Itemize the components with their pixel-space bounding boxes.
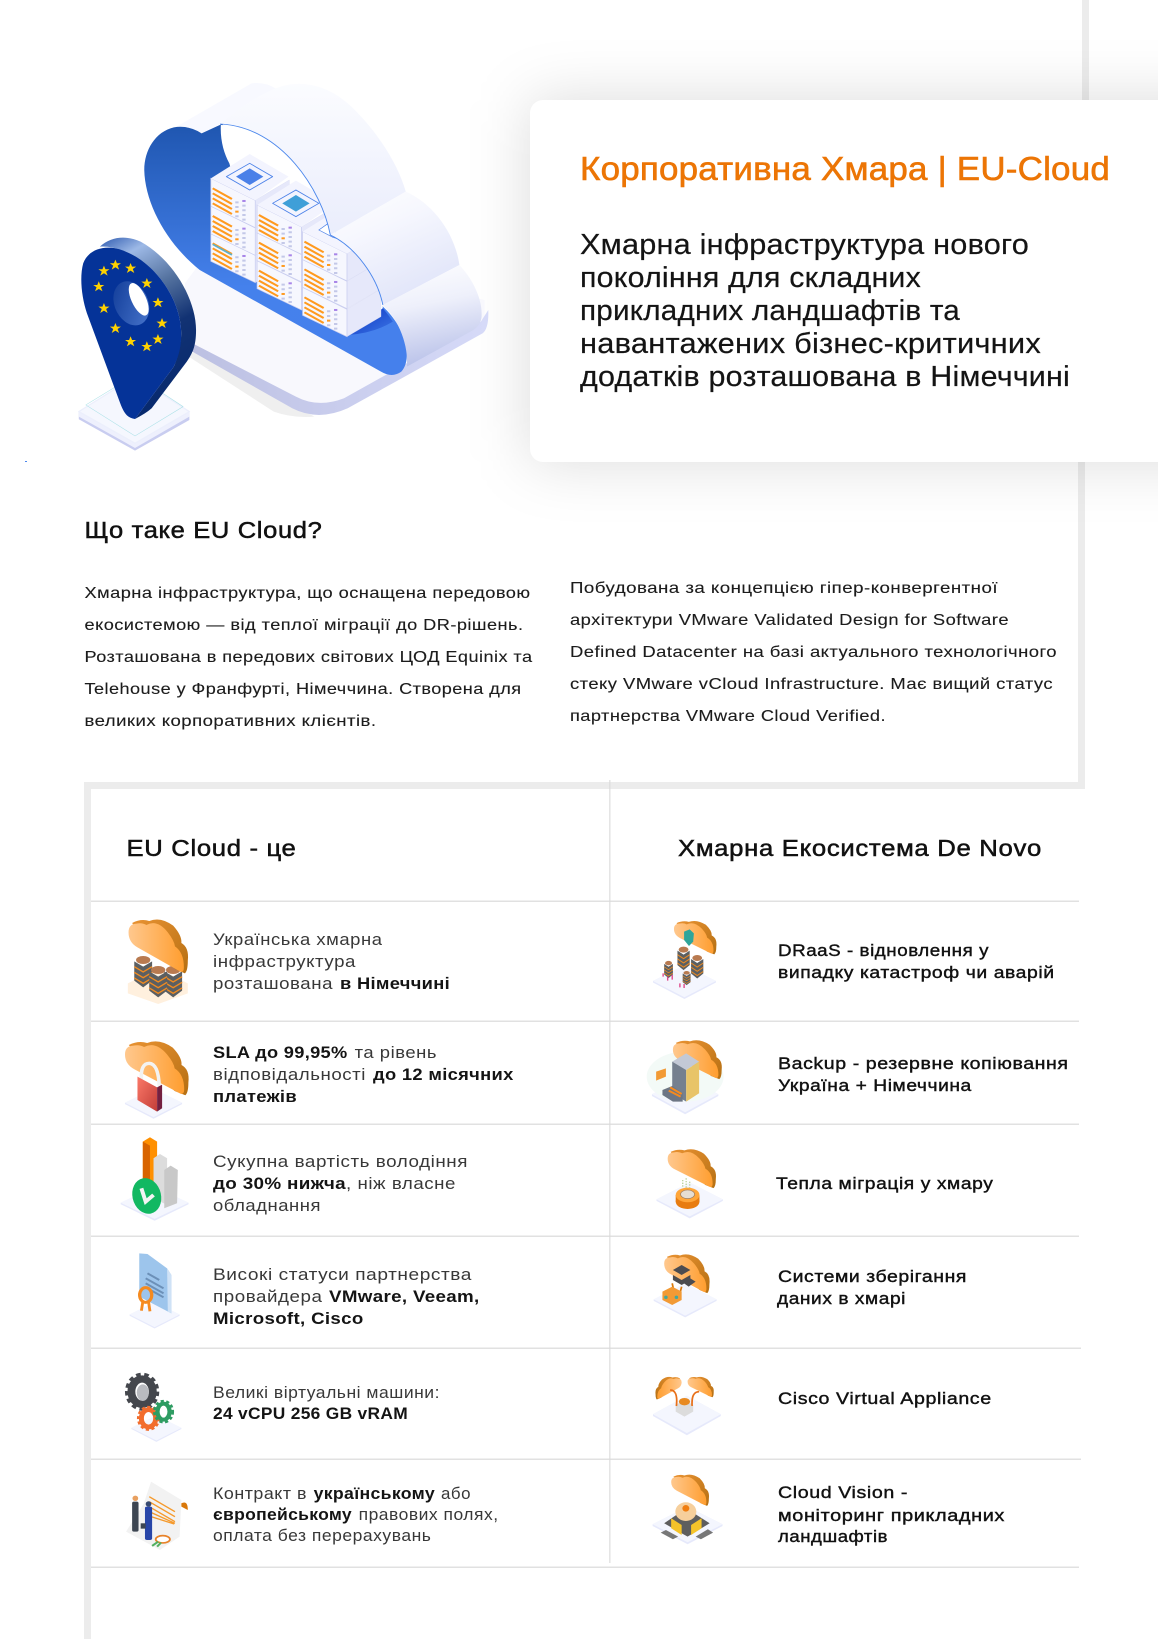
text [213, 1043, 514, 1106]
server column 2 [257, 181, 335, 310]
text: провайдера [213, 1287, 323, 1306]
text: обладнання [213, 1196, 321, 1215]
left paragraph: великих корпоративних клієнтів. [84, 713, 376, 730]
icon: contract with two people [126, 1482, 188, 1550]
icon: bar chart with check mark [121, 1137, 189, 1221]
text: та рівень [355, 1043, 437, 1062]
row: SLA [125, 1041, 514, 1119]
row: Cloud Vision [653, 1475, 1005, 1546]
lead text: додатків розташована в Німеччині [580, 361, 1070, 393]
icon: cloud migration [656, 1149, 723, 1218]
left paragraph [84, 585, 532, 730]
text: DRaaS - відновлення у [778, 941, 989, 960]
text: даних в хмарі [777, 1289, 906, 1308]
text: Тепла міграція у хмару [776, 1174, 993, 1193]
lead text: покоління для складних [580, 262, 921, 294]
icon: backup file cabinet [647, 1040, 724, 1114]
right paragraph: Defined Datacenter на базі актуального технологічного [570, 644, 1057, 661]
right paragraph: партнерства VMware Cloud Verified. [570, 708, 886, 725]
text [778, 1483, 1005, 1546]
text: ландшафтів [778, 1527, 888, 1546]
lead text: прикладних ландшафтів та [580, 295, 961, 327]
left paragraph: Telehouse у Франфурті, Німеччина. Створена для [84, 681, 522, 698]
heading: left column: EU Cloud - це [126, 835, 296, 861]
text: Українська хмарна [213, 930, 383, 949]
text [778, 941, 1055, 982]
left paragraph: Розташована в передових світових ЦОД Equinix та [84, 649, 532, 666]
icon: gears [127, 1374, 181, 1442]
text: , ніж власне [346, 1174, 456, 1193]
illustration: EU location pin [79, 238, 196, 451]
text: до 30% нижча [213, 1174, 346, 1193]
text: 24 vCPU 256 GB vRAM [213, 1404, 408, 1423]
text: випадку катастроф чи аварій [778, 963, 1055, 982]
text: Високі статуси партнерства [213, 1265, 472, 1284]
row: storage [654, 1254, 967, 1317]
right paragraph: архітектури VMware Validated Design for Software [570, 612, 1009, 629]
text: розташована [213, 974, 333, 993]
row: Backup [647, 1040, 1069, 1114]
text: Microsoft, Cisco [213, 1309, 364, 1328]
row: TCO [121, 1137, 468, 1221]
row: partner statuses [130, 1253, 480, 1329]
left paragraph: Хмарна інфраструктура, що оснащена передовою [84, 585, 530, 602]
table grid lines [91, 780, 1081, 1568]
right paragraph [570, 580, 1057, 725]
title: Корпоративна Хмара | EU-Cloud [580, 150, 1110, 187]
text [213, 930, 450, 993]
text: європейському [213, 1505, 352, 1524]
text [213, 1152, 468, 1215]
EU stars [93, 260, 168, 351]
text: українському [314, 1484, 435, 1503]
server column 1 [211, 154, 289, 283]
text: Україна + Німеччина [778, 1076, 972, 1095]
left paragraph: екосистемою — від теплої міграції до DR-рішень. [84, 617, 524, 634]
right paragraph: Побудована за концепцією гіпер-конвергентної [570, 580, 998, 597]
text: або [441, 1484, 471, 1503]
text [213, 1265, 480, 1328]
text: платежів [213, 1087, 297, 1106]
text: Backup - резервне копіювання [778, 1054, 1069, 1073]
text: відповідальності [213, 1065, 366, 1084]
text: Cloud Vision - [778, 1483, 908, 1502]
text: Великі віртуальні машини: [213, 1383, 440, 1402]
text [777, 1267, 967, 1308]
text: моніторинг прикладних [778, 1506, 1005, 1525]
server column 3 [303, 207, 381, 337]
icon: cloud over servers [128, 919, 188, 1004]
row: virtual machines [127, 1374, 440, 1442]
row: Ukrainian cloud in Germany [128, 919, 450, 1004]
row: warm migration [656, 1149, 993, 1218]
text: Cisco Virtual Appliance [778, 1389, 992, 1408]
text [778, 1054, 1069, 1095]
lead text: Хмарна інфраструктура нового [580, 229, 1029, 261]
cloud bumps [220, 84, 482, 367]
icon: padlock with cloud [125, 1041, 189, 1119]
text: правових полях, [359, 1505, 499, 1524]
row: contract [126, 1482, 499, 1550]
text [213, 1383, 440, 1423]
lead text: навантажених бізнес-критичних [580, 328, 1041, 360]
row: Cisco [653, 1377, 992, 1435]
text: Системи зберігання [778, 1267, 967, 1286]
icon: cloud storage [654, 1254, 717, 1317]
section: what is EU Cloud [84, 517, 1057, 730]
text: до 12 місячних [373, 1065, 514, 1084]
icon: monitoring [653, 1475, 723, 1544]
panel: intro card [530, 100, 1158, 462]
text: в Німеччині [340, 974, 450, 993]
lead text [580, 229, 1070, 393]
text: VMware, Veeam, [329, 1287, 480, 1306]
icon: virtual appliance [653, 1377, 721, 1435]
heading: right column: Хмарна Екосистема De Novo [678, 835, 1042, 861]
text: оплата без перерахувань [213, 1526, 431, 1545]
icon: certificate document [130, 1253, 180, 1329]
text: SLA до 99,95% [213, 1043, 348, 1062]
text [213, 1484, 499, 1545]
row: DRaaS [653, 921, 1055, 999]
text: інфраструктура [213, 952, 356, 971]
right paragraph: стеку VMware vCloud Infrastructure. Має вищий статус [570, 676, 1053, 693]
heading: Що таке EU Cloud? [84, 517, 322, 543]
pin base [79, 375, 189, 451]
icon: disaster recovery [653, 921, 716, 999]
text: Сукупна вартість володіння [213, 1152, 468, 1171]
text: Контракт в [213, 1484, 307, 1503]
illustration: isometric cloud with servers [144, 83, 488, 417]
